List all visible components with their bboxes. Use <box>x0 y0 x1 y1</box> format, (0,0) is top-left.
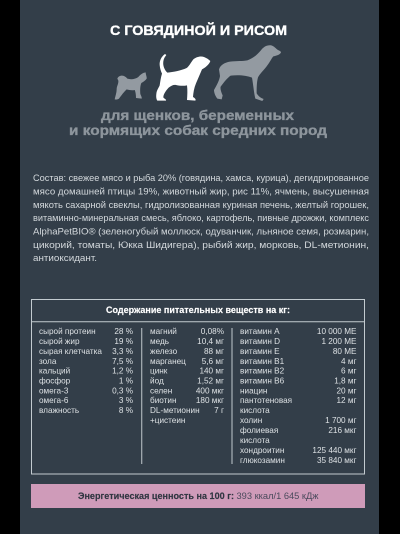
column 3: vitamins: витамин A <box>240 327 280 336</box>
column 3: vitamins: фолиевая <box>240 426 278 435</box>
column 1: main nutrients: 28 % <box>114 327 133 336</box>
column 2: minerals: железо <box>150 347 178 356</box>
column 1: main nutrients: 3 % <box>119 396 133 405</box>
column 2: minerals: +цистеин <box>150 416 185 425</box>
energy value bar: Энергетическая ценность на 100 г: <box>78 491 234 501</box>
column 3: vitamins: витамин D <box>240 337 280 346</box>
composition text block: антиоксидант. <box>33 253 97 263</box>
column 1: main nutrients: 1,2 % <box>112 366 133 376</box>
table frame <box>32 300 364 474</box>
column 2: minerals: 1,52 мг <box>197 376 224 386</box>
column 1: main nutrients: влажность <box>39 406 79 415</box>
subtitle: для щенков, беременных <box>101 108 295 123</box>
column 2: minerals <box>150 327 224 425</box>
column 1: main nutrients: омега-6 <box>39 396 69 405</box>
column 2: minerals: 10,4 мг <box>197 337 224 346</box>
column 3: vitamins <box>240 327 357 465</box>
column 3: vitamins: глюкозамин <box>240 456 285 465</box>
column 2: minerals: магний <box>150 327 177 336</box>
column 2: minerals: 88 мг <box>204 347 224 356</box>
column 2: minerals: DL-метионин <box>150 406 200 415</box>
column 3: vitamins: 35 840 мкг <box>317 456 357 465</box>
column 2: minerals: селен <box>150 386 172 396</box>
column 2: minerals: 140 мг <box>199 366 224 376</box>
column 3: vitamins: 1 200 МЕ <box>321 337 357 346</box>
column 3: vitamins: пантотеновая <box>240 396 292 405</box>
column 1: main nutrients <box>39 327 133 415</box>
column 1: main nutrients: сырой протеин <box>39 327 96 336</box>
column 3: vitamins: 20 мг <box>336 386 357 396</box>
column 3: vitamins: холин <box>240 416 262 425</box>
column 3: vitamins: витамин E <box>240 347 280 356</box>
column 3: vitamins: 80 МЕ <box>333 347 357 356</box>
column 3: vitamins: 10 000 МЕ <box>317 327 357 336</box>
column 2: minerals: цинк <box>150 366 168 376</box>
column 1: main nutrients: 1 % <box>119 376 133 386</box>
column 3: vitamins: хондроитин <box>240 446 284 455</box>
column 1: main nutrients: фосфор <box>39 376 71 386</box>
column 3: vitamins: 1,8 мг <box>334 376 357 386</box>
column 2: minerals: 180 мкг <box>196 396 224 405</box>
energy value bar: 393 ккал/1 645 кДж <box>236 491 319 501</box>
column 2: minerals: 5,6 мг <box>202 357 224 366</box>
column 3: vitamins: 4 мг <box>341 357 357 366</box>
column 3: vitamins: кислота <box>240 436 270 445</box>
column 1: main nutrients: 8 % <box>119 406 133 415</box>
column 1: main nutrients: 3,3 % <box>112 347 133 356</box>
column dividers <box>142 328 232 464</box>
column 1: main nutrients: омега-3 <box>39 386 69 396</box>
column 1: main nutrients: кальций <box>39 366 70 376</box>
composition text block <box>33 173 369 263</box>
composition text block: витаминно-минеральная смесь, яблоко, картофель, пивные дрожжи, комплекс <box>33 213 369 223</box>
column 2: minerals: йод <box>150 376 164 386</box>
icon: three dog silhouettes <box>115 45 281 101</box>
column 2: minerals: 0,08% <box>201 327 224 336</box>
nutrition table <box>32 300 364 474</box>
column 3: vitamins: 12 мг <box>336 396 357 405</box>
column 2: minerals: биотин <box>150 396 176 405</box>
composition text block: Состав: свежее мясо и рыба 20% (говядина, хамса, курица), дегидрированное <box>33 173 369 183</box>
column 1: main nutrients: 19 % <box>114 337 133 346</box>
composition text block: мякоть сахарной свеклы, гидролизованная куриная печень, желтый горошек, <box>33 200 369 210</box>
icon: large dog <box>214 45 281 101</box>
column 2: minerals: 400 мкг <box>196 386 224 396</box>
column 2: minerals: медь <box>150 337 169 346</box>
subtitle <box>69 108 327 138</box>
column 3: vitamins: 216 мкг <box>328 426 357 435</box>
column 3: vitamins: витамин B6 <box>240 376 285 386</box>
table heading: Содержание питательных веществ на кг: <box>106 305 290 315</box>
column 1: main nutrients: 7,5 % <box>112 357 133 366</box>
column 1: main nutrients: 0,3 % <box>112 386 133 396</box>
column 1: main nutrients: зола <box>39 357 57 366</box>
column 3: vitamins: 6 мг <box>341 366 357 376</box>
column 3: vitamins: витамин B1 <box>240 357 285 366</box>
column 1: main nutrients: сырая клетчатка <box>39 347 102 356</box>
column 3: vitamins: 125 440 мкг <box>312 446 357 455</box>
icon: small dog <box>115 72 147 100</box>
column 3: vitamins: витамин B2 <box>240 366 285 376</box>
composition text block: мясо домашней птицы 19%, животный жир, рис 11%, ячмень, высушенная <box>33 186 369 196</box>
column 2: minerals: 7 г <box>214 406 224 415</box>
column 3: vitamins: кислота <box>240 406 270 415</box>
column 1: main nutrients: сырой жир <box>39 337 80 346</box>
column 3: vitamins: 1 700 мг <box>325 416 357 425</box>
composition text block: AlphaPetBIO® (зеленогубый моллюск, одуванчик, льняное семя, розмарин, <box>33 226 369 236</box>
composition text block: цикорий, томаты, Юкка Шидигера), рыбий жир, морковь, DL-метионин, <box>33 240 369 250</box>
column 2: minerals: марганец <box>150 357 186 366</box>
title: С ГОВЯДИНОЙ И РИСОМ <box>110 21 287 38</box>
column 3: vitamins: ниацин <box>240 386 267 396</box>
energy value bar <box>31 484 365 508</box>
subtitle: и кормящих собак средних пород <box>69 123 327 138</box>
icon: medium dog <box>156 54 210 101</box>
